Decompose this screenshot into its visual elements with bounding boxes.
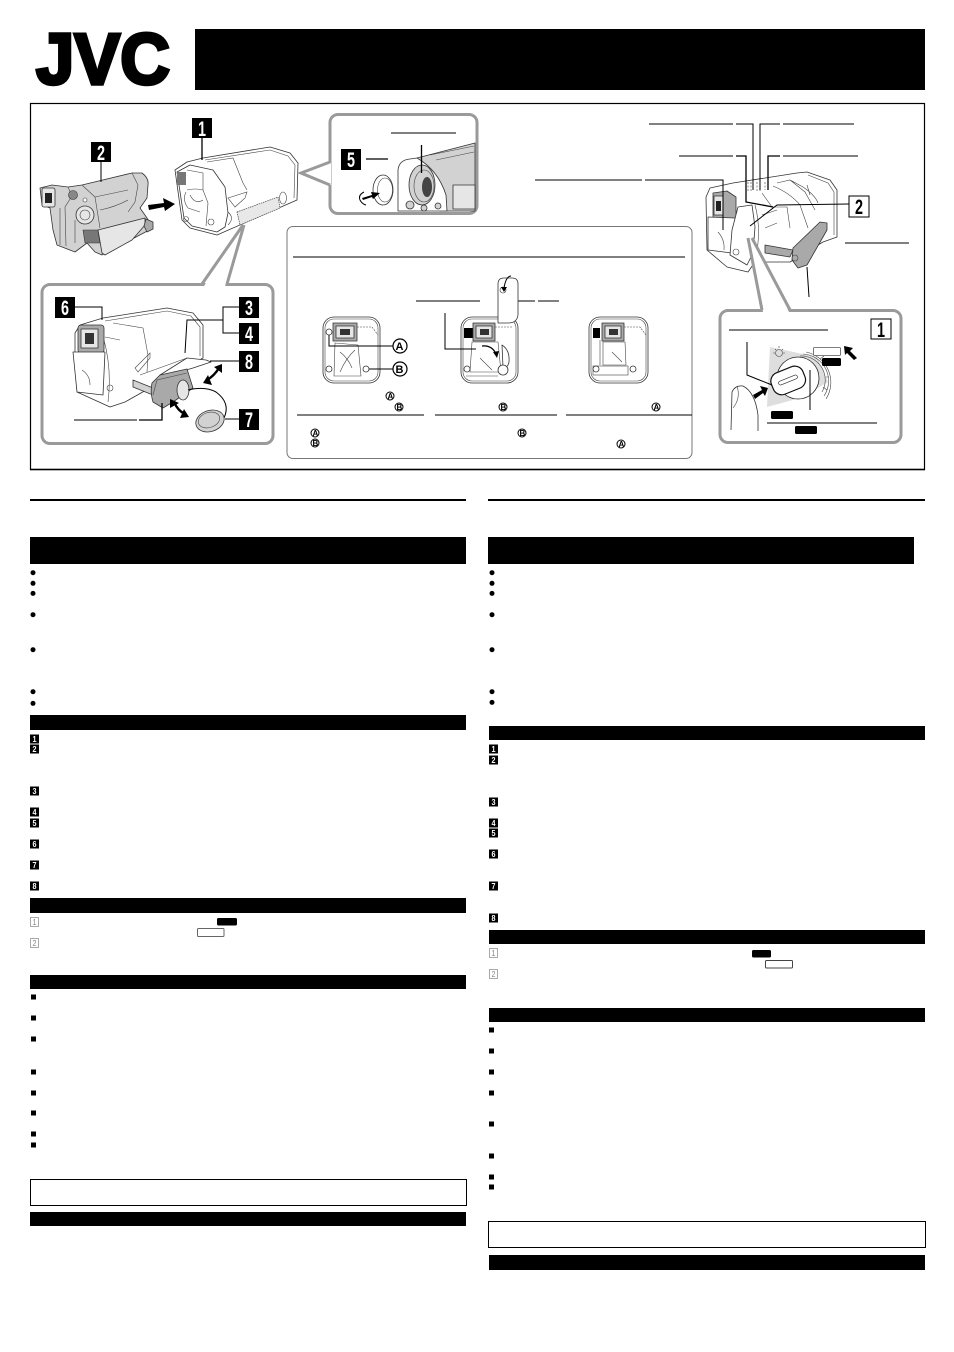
badge 1: 1 [198,118,206,141]
badge 7: 7 [245,409,253,432]
left column [30,499,466,1226]
hand [748,180,818,228]
numbered steps: 3 [32,787,37,796]
marker A: A [396,341,404,353]
panel: eyepiece steps [287,226,692,458]
marker B: B [396,364,404,376]
badge 5: 5 [347,149,355,172]
leader: badge 2 to camcorder [100,162,102,182]
panel: lens adapter callout [300,114,477,214]
note box [488,1222,926,1248]
numbered steps: 1 [32,735,37,744]
outlined steps: 2 [492,970,496,979]
adapter ring [373,175,393,205]
outlined steps: 1 [32,918,37,927]
numbered steps: 5 [32,819,37,828]
header bar: main heading [30,537,466,564]
numbered steps: 3 [492,798,496,807]
numbered steps: 1 [492,745,496,754]
screw-on arrow [360,192,380,205]
black pill [822,358,841,366]
bullet list [30,570,36,706]
panel: case details callout [42,225,273,444]
numbered steps: 4 [492,819,496,828]
header bar [30,1212,466,1226]
numbered steps [489,744,498,923]
numbered steps: 5 [492,829,496,838]
outlined badge 2: 2 [855,196,863,219]
dial [767,346,831,407]
step 3 diagram [589,317,648,383]
bullet list [490,570,494,705]
square bullets [31,994,36,1148]
logo: JVC: JVC [36,20,170,100]
badge 8 [239,351,259,374]
header bar [489,1008,925,1022]
numbered steps: 8 [492,914,496,923]
badge 4: 4 [245,323,253,346]
white pill [814,348,840,356]
badge 8: 8 [245,351,253,374]
panel: illustration frame [30,104,925,470]
small circled letters: B [520,429,526,438]
step 2 diagram [445,276,518,383]
small circled letters: B [396,403,402,412]
badge 1 [192,118,212,141]
camcorder illustration, upper left [40,173,153,255]
panel: power dial callout [720,238,901,442]
hand strap [765,222,827,268]
numbered steps: 4 [32,808,37,817]
header bar [489,726,925,740]
header bar [30,975,466,989]
outlined steps: 1 [492,949,496,958]
numbered steps: 6 [32,840,37,849]
outlined steps: 2 [32,939,37,948]
small circled letters: A [654,403,660,412]
step 1 diagram [323,317,407,383]
small circled letters: A [618,440,624,449]
outlined badge 1 [871,319,891,342]
arrow: insert camcorder into case [148,198,175,211]
header bar [30,715,466,730]
outlined steps [490,948,792,979]
lens cover and flap [151,358,211,408]
black pill [771,411,793,419]
badge 3 [239,297,259,320]
outlined badge 2 [849,196,869,219]
small circled letters: B [500,403,506,412]
right column [488,499,926,1270]
badge 3: 3 [245,297,253,320]
arrow: press dial [753,386,768,399]
finger [731,386,758,431]
header bar [30,898,466,913]
badge 6: 6 [61,297,69,320]
arrow: flap motion [203,364,222,385]
note box [30,1180,466,1206]
camcorder front view [398,143,475,211]
numbered steps: 6 [492,850,496,859]
leader lines to camcorder controls [535,124,909,243]
small circled letters: B [312,439,318,448]
header bar [489,930,925,944]
badge 2: 2 [97,142,105,165]
small circled letters: A [388,392,394,401]
numbered steps: 8 [32,882,37,891]
marine case illustration [175,147,298,235]
leader: badge 1 to case [201,138,203,160]
title bar [195,29,925,90]
badge 7 [239,409,259,432]
square bullets [489,1028,494,1190]
badge 4 [239,323,259,346]
black pill [795,426,817,434]
header bar: main heading [488,537,914,564]
small circled letters [311,392,660,449]
numbered steps [30,734,39,891]
outlined badge 1: 1 [877,319,885,342]
case, rear view [73,308,203,407]
small circled letters: A [312,429,318,438]
badge 5 [341,149,361,172]
numbered steps: 2 [492,756,496,765]
numbered steps: 7 [492,882,496,891]
lens cap with cord [188,388,227,435]
badge 6 [55,297,75,320]
numbered steps: 7 [32,861,37,870]
badge 2 [91,142,111,165]
outlined steps [30,918,237,948]
arrow: cover motion [170,399,189,418]
header bar [489,1255,925,1270]
arrow: dial direction [844,346,857,360]
camcorder in hand illustration [706,172,837,297]
numbered steps: 2 [32,745,37,754]
